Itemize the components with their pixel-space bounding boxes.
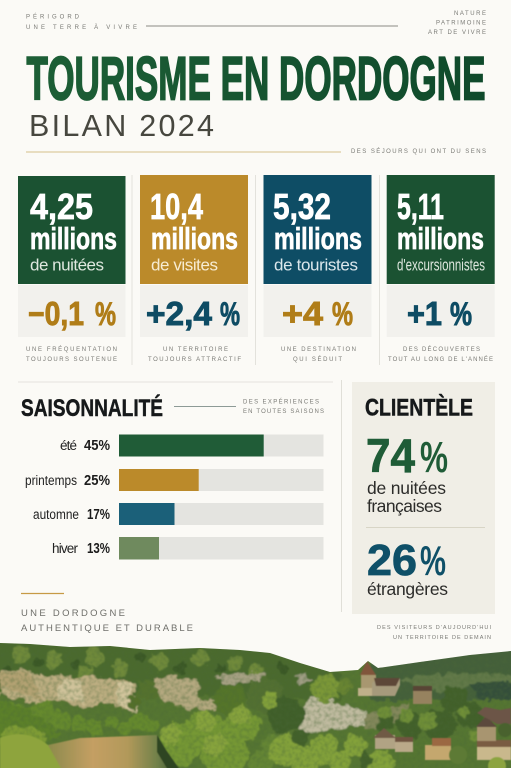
panel: excursionnistes: 5,11 (397, 186, 444, 227)
bar chart: saisonnalité: 13% (87, 541, 110, 557)
top right tagline: NATURE (454, 11, 486, 17)
panel: clientèle: 74 (366, 429, 415, 482)
panel: excursionnistes: millions (397, 221, 484, 256)
panel: touristes: millions (274, 221, 362, 256)
panel: clientèle: % (420, 433, 448, 482)
clientèle note (377, 625, 491, 641)
panel: nuitées (18, 176, 126, 363)
top right tagline: PATRIMOINE (436, 20, 486, 26)
panel: visites: +2,4 (146, 295, 213, 332)
footer slogan: AUTHENTIQUE ET DURABLE (21, 623, 193, 634)
saisonnalité note: EN TOUTES SAISONS (243, 409, 324, 415)
panel: visites: millions (151, 221, 238, 256)
bar chart: saisonnalité: été (60, 438, 77, 453)
bar chart: saisonnalité: 25% (84, 473, 110, 489)
top left tagline: UNE TERRE À VIVRE (26, 24, 139, 31)
footer slogan: UNE DORDOGNE (21, 608, 125, 619)
bar chart: saisonnalité: 45% (84, 438, 110, 454)
heading: saisonnalité: SAISONNALITÉ (21, 394, 163, 422)
panel: nuitées: −0,1 (28, 295, 84, 332)
panel: excursionnistes: +1 (407, 295, 442, 332)
panel: touristes: QUI SÉDUIT (293, 356, 342, 363)
panel: visites (140, 175, 248, 363)
panel: nuitées: 4,25 (30, 186, 93, 227)
bar chart: saisonnalité: printemps (25, 473, 77, 488)
panel: touristes (264, 175, 372, 363)
panel: excursionnistes (387, 175, 495, 363)
panel: touristes: de touristes (274, 256, 358, 274)
photo: Dordogne valley landscape (0, 630, 511, 768)
panel: touristes: +4 (282, 295, 324, 332)
panel: touristes: UNE DESTINATION (281, 347, 356, 353)
panel: visites: UN TERRITOIRE (163, 347, 228, 353)
saisonnalité note (243, 398, 324, 415)
panel: nuitées: de nuitées (30, 256, 104, 274)
panel: nuitées: UNE FRÉQUENTATION (26, 346, 117, 353)
panel: excursionnistes: % (450, 296, 472, 332)
subtitle note: DES SÉJOURS QUI ONT DU SENS (351, 148, 486, 155)
bar chart: saisonnalité: hiver (52, 541, 78, 556)
panel: nuitées: % (95, 296, 116, 332)
footer slogan (21, 608, 193, 634)
top left tagline (26, 14, 139, 31)
panel: visites: de visites (151, 256, 218, 274)
bar chart: saisonnalité (25, 434, 324, 560)
panel: clientèle: 26 (367, 536, 417, 585)
panel: nuitées: TOUJOURS SOUTENUE (26, 357, 117, 363)
clientèle note: DES VISITEURS D'AUJOURD'HUI (377, 625, 491, 631)
panel: clientèle: françaises (367, 496, 442, 516)
panel: excursionnistes: DES DÉCOUVERTES (403, 346, 480, 353)
top right tagline: ART DE VIVRE (428, 30, 486, 36)
top left tagline: PÉRIGORD (26, 14, 81, 20)
panel: clientèle: de nuitées (367, 478, 446, 498)
top right tagline (428, 11, 486, 36)
subtitle: BILAN 2024 (29, 109, 214, 143)
panel: visites: 10,4 (150, 186, 203, 227)
panel: visites: TOUJOURS ATTRACTIF (148, 357, 241, 363)
panel: visites: % (220, 296, 240, 332)
panel: clientèle: CLIENTÈLE (365, 394, 473, 422)
bar chart: saisonnalité: 17% (87, 507, 110, 523)
panel: clientèle: % (420, 537, 446, 584)
panel: excursionnistes: TOUT AU LONG DE L'ANNÉE (388, 356, 493, 363)
panel: clientèle (352, 382, 495, 614)
panel: clientèle: étrangères (367, 579, 448, 599)
clientèle note: UN TERRITOIRE DE DEMAIN (393, 635, 491, 641)
panel: nuitées: millions (30, 221, 117, 256)
bar chart: saisonnalité: automne (33, 507, 79, 522)
panel: touristes: % (332, 296, 353, 332)
saisonnalité note: DES EXPÉRIENCES (243, 398, 319, 406)
panel: touristes: 5,32 (273, 186, 331, 227)
